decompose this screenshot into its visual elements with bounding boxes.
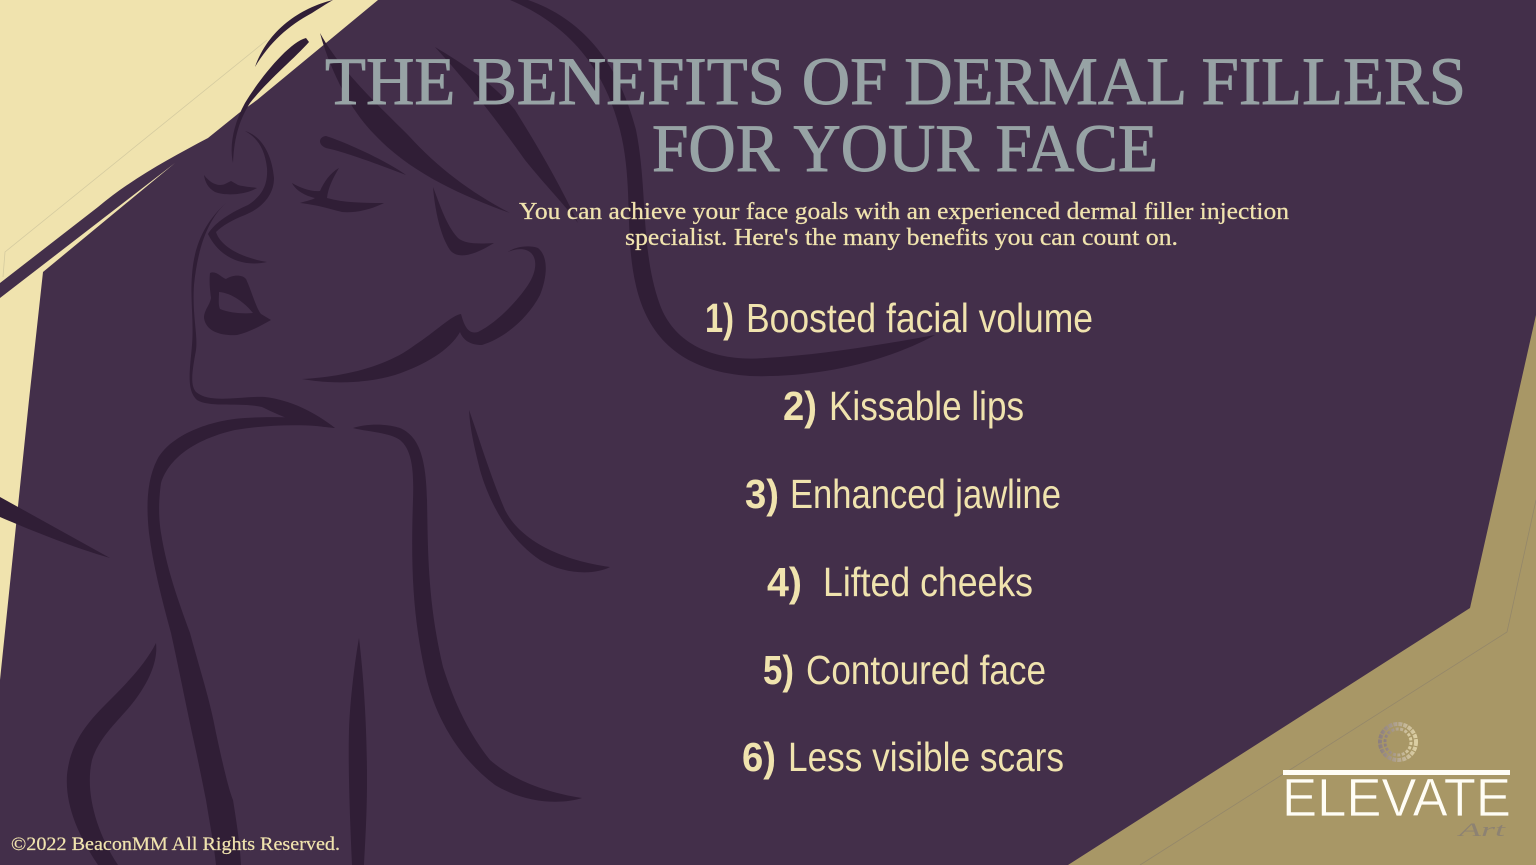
logo: Elevate Art [1282,724,1511,841]
benefits list [705,295,1093,780]
benefit 4: Lifted cheeks [823,559,1033,605]
logo bar [1283,770,1510,775]
illustration: woman line art silhouette [0,0,935,865]
benefit 1: Boosted facial volume [746,295,1093,341]
title [325,43,1466,186]
benefit 6: Less visible scars [788,734,1064,780]
subtitle text block: specialist. Here's the many benefits you can count on. [625,225,1178,251]
logo script: Art [1455,820,1506,841]
benefit 2: 2) [783,383,817,429]
benefit 2: Kissable lips [829,383,1024,429]
benefit 5: 5) [763,647,794,693]
benefit 5: Contoured face [806,647,1046,693]
icon: mandala [1380,724,1416,760]
copyright notice: ©2022 BeaconMM All Rights Reserved. [11,834,340,855]
benefit 3: 3) [745,471,779,517]
panel: gold corner shape [1068,315,1536,865]
benefit 4: 4) [767,559,802,605]
panel: cream corner shape [0,0,378,680]
subtitle text block: You can achieve your face goals with an experienced dermal filler injection [519,199,1289,225]
subtitle text block [519,199,1289,251]
benefit 6: 6) [742,734,776,780]
benefit 3: Enhanced jawline [790,471,1061,517]
title: FOR YOUR FACE [652,110,1158,186]
benefit 1: 1) [705,295,734,341]
title: THE BENEFITS OF DERMAL FILLERS [325,43,1466,119]
logo wordmark: ELEVATE [1282,768,1511,828]
